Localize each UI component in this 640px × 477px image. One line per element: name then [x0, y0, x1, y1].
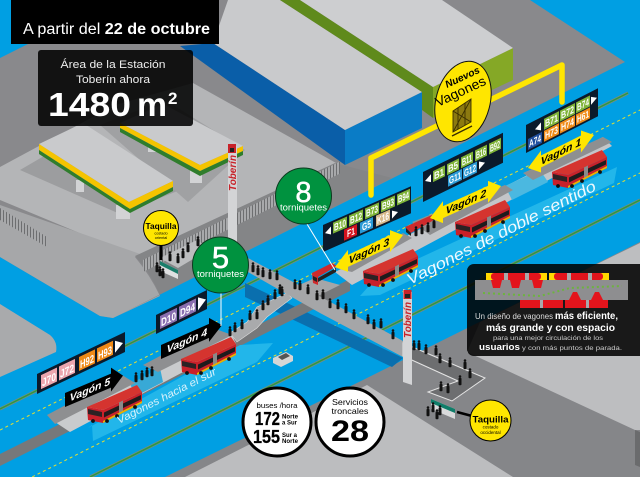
label: vagones de doble sentido: Vagones de doble sentido — [404, 178, 599, 289]
callout: taquilla costado oriental — [144, 210, 178, 260]
box: area of station — [38, 50, 193, 126]
bridge shadow — [245, 283, 403, 367]
building: blue warehouse — [180, 0, 422, 165]
panel: wagon design: para una mejor circulación de los — [493, 335, 604, 342]
sign: vagón 3 routes: B93 — [382, 197, 394, 213]
sign: vagón 3 routes — [323, 186, 411, 252]
sign: vagón 2 routes: G12 — [464, 162, 476, 180]
box: area of station: 2 — [168, 89, 177, 108]
sign: vagón 3 routes: B73 — [366, 204, 378, 220]
sign: vagón 4 routes: D10 — [161, 310, 176, 329]
ground north of the road — [0, 0, 625, 318]
callout: taquilla costado oriental: Taquilla — [146, 221, 177, 231]
badge: nuevos vagones: Vagones — [433, 73, 488, 110]
circle: servicios troncales: troncales — [332, 406, 368, 416]
sign: vagón 3 routes: B10 — [334, 218, 346, 234]
taquilla building east — [156, 236, 210, 279]
building: green warehouse — [280, 0, 513, 118]
band: vagones hacia el sur — [88, 343, 273, 441]
sign: vagón 3 routes: G5 — [362, 219, 371, 234]
callout: taquilla costado occidental: Taquilla — [472, 414, 509, 426]
sign: vagón 5 routes: J72 — [60, 362, 74, 381]
sign: vagón 5 routes: J70 — [42, 370, 56, 389]
sign: vagón 2 routes: B92 — [490, 139, 500, 155]
sign: vagón 2 routes: B16 — [476, 146, 486, 162]
station south — [47, 328, 236, 432]
station north — [335, 137, 612, 285]
arrow: vagón 4 — [161, 312, 222, 363]
badge: nuevos vagones: Nuevos — [444, 65, 482, 91]
arrow: vagón 1 — [528, 124, 594, 179]
icon: wagon crate — [452, 99, 472, 136]
panel: wagon design: usuarios — [479, 342, 520, 353]
sign: vagón 3 routes: B12 — [350, 211, 362, 227]
sign: vagón 1 routes: B74 — [577, 96, 589, 114]
arrow: vagón 4: Vagón 4 — [167, 327, 207, 356]
callout: 8 torniquetes: torniquetes — [280, 202, 328, 212]
bus: partial near vagón 2 — [405, 215, 434, 236]
band: vagones de doble sentido — [360, 167, 617, 296]
callout: 8 torniquetes — [276, 168, 335, 270]
circle: buses por hora: Norte — [282, 414, 299, 420]
box: area of station: Toberín ahora — [76, 74, 151, 86]
tower: Toberín north — [228, 144, 239, 246]
circle: buses por hora: Norte — [282, 439, 299, 445]
sign: vagón 1 routes: H73 — [545, 124, 558, 142]
canopy: gas station right — [120, 104, 243, 183]
sign: vagón 3 routes: K16 — [377, 211, 389, 227]
ground lot lower left — [0, 304, 56, 377]
arrow: vagón 3: Vagón 3 — [349, 236, 390, 267]
circle: buses por hora — [243, 388, 311, 456]
sign: vagón 1 routes: B71 — [545, 112, 558, 130]
circle: buses por hora: Sur a — [282, 433, 298, 439]
sign: vagón 2 routes: G11 — [449, 170, 461, 187]
callout: 5 torniquetes: 5 — [212, 240, 229, 275]
sign: vagón 2 routes — [423, 133, 503, 202]
ground south of the road — [165, 242, 640, 477]
title bar: A partir del 22 de octubre — [23, 21, 210, 38]
sign: vagón 1 routes — [526, 88, 598, 153]
panel: wagon design: y con más puntos de parada. — [522, 345, 622, 352]
sign: vagón 4 routes — [156, 290, 207, 334]
arrow: vagón 1: Vagón 1 — [541, 136, 581, 168]
box: area of station: 1480 — [48, 86, 131, 123]
sign: vagón 5 routes — [37, 332, 125, 394]
panel: wagon design: más eficiente, — [555, 310, 618, 322]
pedestrian bridge — [230, 258, 485, 401]
title bar — [11, 0, 219, 44]
arrow: vagón 5 — [65, 363, 123, 411]
callout: taquilla costado oriental: costado — [154, 232, 168, 236]
callout: taquilla costado occidental: costado — [483, 424, 499, 430]
car — [273, 352, 293, 367]
tower: Toberín north: Toberín — [228, 155, 239, 191]
callout: 8 torniquetes: 8 — [295, 177, 312, 209]
badge: nuevos vagones — [426, 55, 500, 148]
sign: vagón 4 routes: D94 — [180, 300, 195, 320]
circle: servicios troncales: Servicios — [332, 397, 368, 407]
circle: servicios troncales — [316, 388, 384, 456]
sign: vagón 1 routes: H74 — [561, 116, 574, 134]
taquilla building west — [426, 399, 455, 419]
panel: wagon design — [467, 264, 640, 356]
station strip — [0, 279, 350, 466]
arrow: vagón 5: Vagón 5 — [70, 376, 111, 404]
sign: vagón 3 routes: F1 — [347, 226, 355, 240]
callout: taquilla costado oriental: oriental — [155, 236, 167, 240]
sign: vagón 2 routes: B5 — [448, 159, 458, 176]
box: area of station: m — [137, 86, 167, 123]
circle: buses por hora: buses /hora — [256, 401, 298, 410]
circle: servicios troncales: 28 — [331, 415, 369, 448]
arrow: vagón 3 — [335, 224, 403, 278]
bridge: ramp to south station — [230, 293, 292, 342]
sign: vagón 1 routes: B72 — [561, 104, 574, 122]
panel: wagon design: Un diseño de vagones — [475, 312, 553, 321]
bus: partial near vagón 3 — [312, 263, 337, 285]
arrow: vagón 2: Vagón 2 — [446, 188, 486, 217]
sign: vagón 2 routes: B1 — [434, 166, 444, 182]
callout: 5 torniquetes — [192, 237, 248, 326]
arrow: vagón 2 — [430, 175, 501, 229]
circle: buses por hora: 172 — [255, 409, 280, 429]
panel: wagon design: más grande y con espacio — [486, 322, 615, 334]
box: area of station: Área de la Estación — [60, 58, 166, 71]
buses — [87, 150, 607, 423]
sign: vagón 2 routes: B11 — [462, 152, 472, 169]
sign: vagón 1 routes: H61 — [577, 108, 589, 126]
chart: wagon layout diagram — [475, 273, 628, 308]
connector: yellow line — [371, 65, 562, 195]
bridge: stub to north station — [297, 278, 340, 296]
pedestrians — [134, 218, 472, 393]
sign: vagón 3 routes: B94 — [398, 190, 409, 206]
sign: vagón 5 routes: H92 — [80, 352, 94, 371]
circle: buses por hora: 155 — [253, 427, 280, 447]
tower: Toberín south — [403, 289, 414, 385]
callout: 5 torniquetes: torniquetes — [197, 269, 245, 279]
bridge: dark ramp over ground — [403, 343, 485, 401]
sign: vagón 1 routes: A74 — [529, 133, 541, 150]
label: vagones hacia el sur: Vagones hacia el sur — [115, 366, 219, 427]
sign: vagón 5 routes: H93 — [98, 344, 112, 363]
bridge: main deck — [248, 258, 403, 357]
circle: buses por hora: a Sur — [282, 420, 298, 426]
canopy: gas station left — [39, 123, 173, 219]
callout: taquilla costado occidental — [457, 400, 511, 441]
tower: Toberín south: Toberín — [403, 302, 414, 338]
callout: taquilla costado occidental: occidental — [480, 430, 501, 435]
